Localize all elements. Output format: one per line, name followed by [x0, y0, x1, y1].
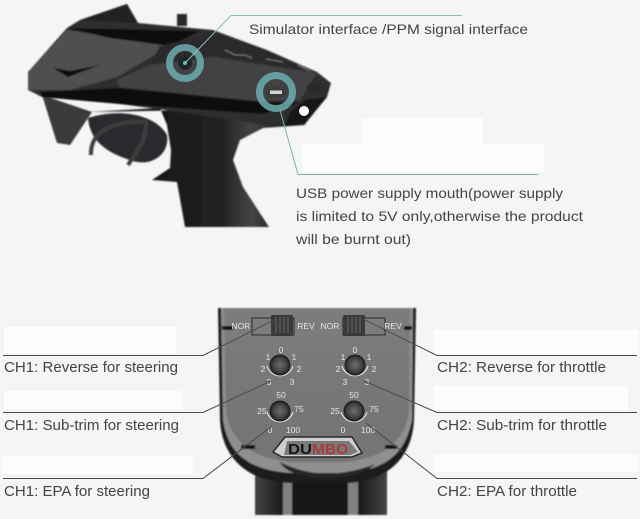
knob: CH2 EPA: 100 — [361, 425, 375, 435]
trigger wheel — [88, 113, 167, 162]
icon: white hole — [299, 106, 309, 116]
logo badge: DUMBO — [273, 437, 362, 458]
knob: CH1 EPA: 75 — [294, 404, 304, 414]
knob: CH1 sub-trim: 2 — [297, 364, 302, 374]
callout: simulator interface marker — [170, 16, 462, 78]
switch: CH1 reverse: NOR — [232, 321, 250, 331]
knob: CH1 sub-trim: 3 — [290, 377, 295, 387]
knob: CH1 EPA: 25 — [257, 406, 267, 416]
photo: transmitter control panel — [218, 308, 416, 515]
knob: CH1 EPA: 0 — [268, 425, 273, 435]
knob: CH1 EPA — [257, 390, 304, 435]
photo: transmitter side view — [28, 4, 331, 227]
label: CH1 EPA: CH1: EPA for steering — [4, 484, 150, 500]
knob: CH2 sub-trim: 1 — [367, 352, 372, 362]
text block: USB power warning: will be burnt out) — [295, 231, 411, 247]
switch: CH2 reverse: REV — [384, 321, 402, 331]
white patches — [302, 118, 544, 172]
label: CH1 sub-trim: CH1: Sub-trim for steering — [4, 418, 179, 434]
knob: CH1 sub-trim: 2 — [261, 364, 266, 374]
logo badge: DUMBO: DU — [288, 441, 312, 458]
callout lines: CH1 — [3, 319, 276, 478]
switch: CH1 reverse — [232, 315, 315, 336]
text block: USB power warning — [295, 185, 583, 247]
knob: CH2 sub-trim: 2 — [372, 364, 377, 374]
knob: CH2 sub-trim: 0 — [353, 345, 358, 355]
knob: CH1 sub-trim — [261, 345, 302, 387]
knob: CH1 sub-trim: 1 — [266, 352, 271, 362]
knob: CH2 EPA: 25 — [330, 406, 340, 416]
text block: USB power warning: is limited to 5V only,otherwise the product — [296, 208, 583, 224]
switch: CH2 reverse — [321, 315, 402, 336]
body — [28, 4, 331, 125]
lower left wedge — [42, 95, 92, 145]
logo badge: DUMBO: MBO — [312, 441, 348, 458]
switch: CH1 reverse: REV — [297, 321, 315, 331]
label: CH2 EPA: CH2: EPA for throttle — [437, 484, 577, 500]
knob: CH1 EPA: 50 — [276, 390, 286, 400]
grip — [218, 308, 416, 515]
knob: CH2 sub-trim: 1 — [341, 352, 346, 362]
antenna stub — [177, 14, 187, 26]
knob: CH1 EPA: 100 — [286, 425, 300, 435]
callout lines: CH2 — [363, 319, 637, 478]
label: CH2 reverse: CH2: Reverse for throttle — [437, 360, 606, 376]
switch: CH2 reverse: NOR — [321, 321, 339, 331]
knob: CH2 sub-trim: 2 — [336, 364, 341, 374]
knob: CH1 sub-trim: 3 — [267, 377, 272, 387]
label: CH1 reverse: CH1: Reverse for steering — [4, 360, 178, 376]
grip — [88, 108, 305, 227]
knob: CH2 EPA: 0 — [341, 425, 346, 435]
knob: CH2 sub-trim — [336, 345, 377, 387]
knob: CH1 sub-trim: 0 — [279, 345, 284, 355]
heading: simulator interface label: Simulator interface /PPM signal interface — [249, 21, 528, 37]
knob: CH2 EPA: 75 — [369, 404, 379, 414]
knob: CH1 sub-trim: 1 — [292, 352, 297, 362]
knob: CH2 sub-trim: 3 — [365, 377, 370, 387]
knob: CH2 EPA — [330, 390, 379, 435]
text block: USB power warning: USB power supply mouth(power supply — [296, 185, 563, 201]
callout: USB port marker — [260, 76, 538, 174]
label: CH2 sub-trim: CH2: Sub-trim for throttle — [437, 418, 607, 434]
knob: CH2 sub-trim: 3 — [343, 377, 348, 387]
knob: CH2 EPA: 50 — [349, 390, 359, 400]
